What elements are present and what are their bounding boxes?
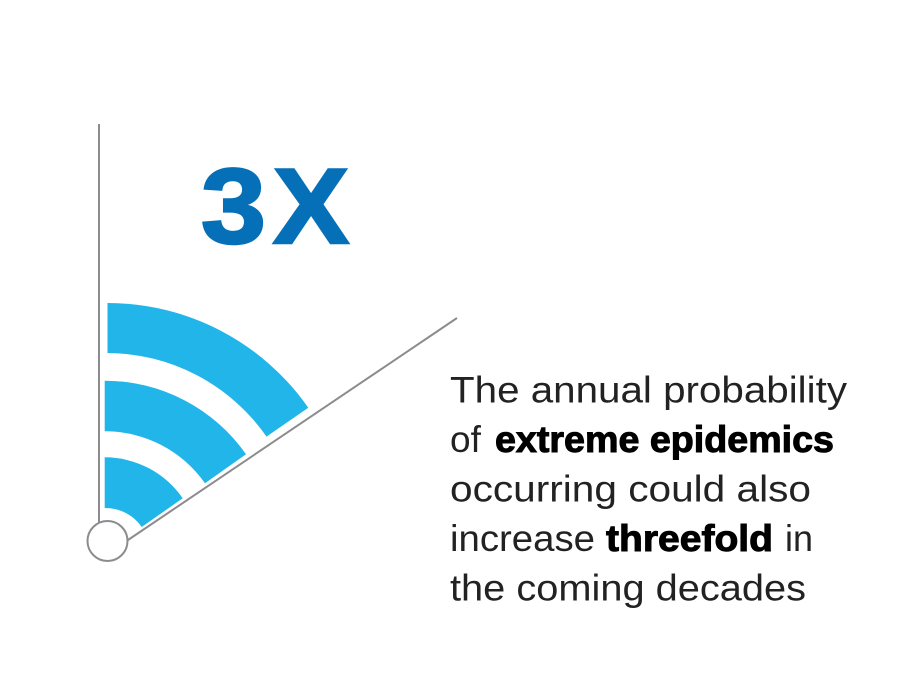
line 2: of [450, 419, 482, 460]
text block: description [450, 370, 848, 608]
diagonal axis [128, 318, 457, 540]
pivot circle [88, 521, 128, 561]
arc: inner band [105, 457, 183, 527]
line 5: the coming decades [450, 568, 806, 608]
line 4: in [785, 518, 813, 559]
heading: 3X: 3 [201, 146, 266, 266]
line 4: increase [450, 518, 595, 559]
chart: fan gauge with three arcs [88, 124, 457, 561]
line 3: occurring could also [450, 468, 811, 510]
line 1: The annual probability [450, 370, 848, 410]
arc: middle band [105, 381, 246, 483]
vertical axis [98, 124, 100, 523]
heading: 3X [201, 146, 349, 266]
line 4: threefold [606, 518, 773, 559]
heading: 3X: X [273, 146, 349, 266]
line 4 [450, 518, 813, 559]
arc: outer band [108, 303, 308, 437]
line 2: extreme epidemics [495, 419, 834, 460]
